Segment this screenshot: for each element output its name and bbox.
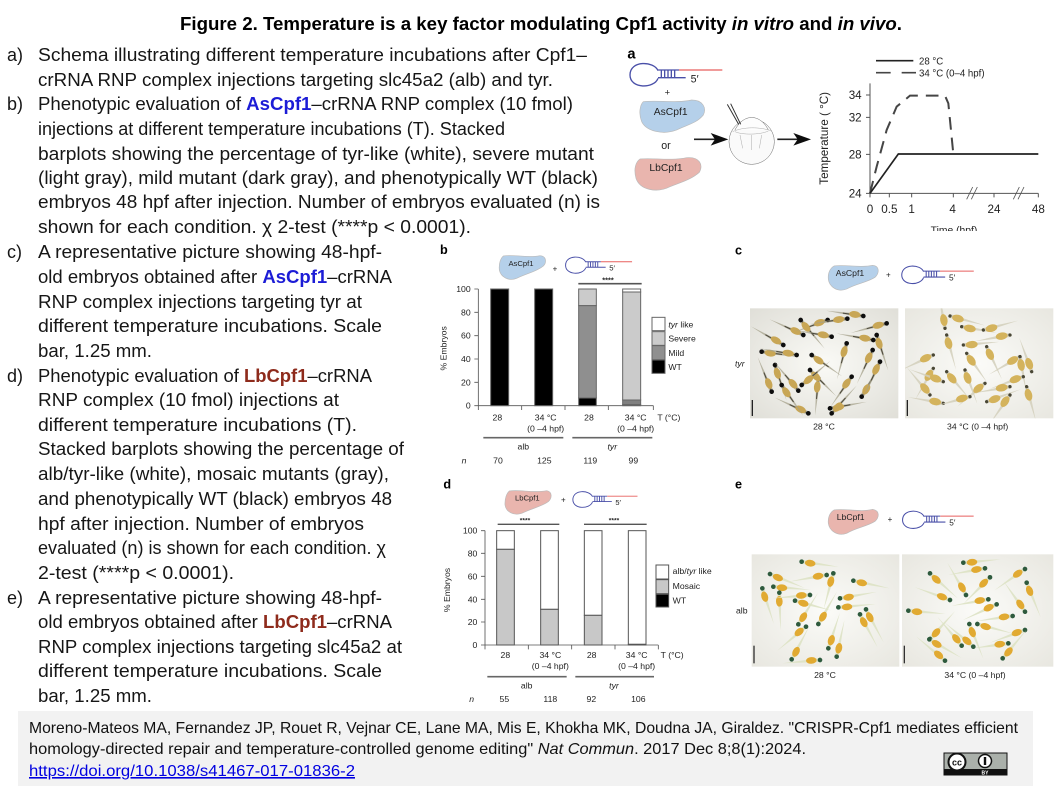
crRNA hairpin: 5′ — [615, 498, 621, 507]
x labels: alb — [518, 441, 529, 451]
temperature line chart — [818, 57, 1045, 237]
x labels: 28 — [584, 412, 594, 422]
temperature line chart: 4 — [949, 203, 956, 216]
axes — [442, 526, 658, 650]
x labels: 70 — [493, 455, 503, 465]
axes: 100 — [463, 526, 478, 536]
x labels: n — [462, 455, 467, 465]
arrow — [777, 133, 811, 146]
x labels — [462, 412, 680, 465]
caption b: shown for each condition. χ 2-test (****p < 0.0001). — [38, 217, 471, 237]
axes: 100 — [456, 284, 471, 294]
citation box: https://doi.org/10.1038/s41467-017-01836-2 — [29, 763, 355, 780]
citation box: Moreno-Mateos MA, Fernandez JP, Rouet R, Vejnar CE, Lane MA, Mis E, Khokha MK, Doudna JA, Giraldez. "CRISPR-Cpf1 mediates efficient — [29, 720, 1019, 737]
photo: tyr 28 °C — [750, 307, 898, 418]
AsCpf1 blob — [828, 265, 878, 290]
x labels: 99 — [629, 455, 638, 465]
photo: tyr 34 °C — [899, 292, 1053, 426]
axes: 40 — [461, 354, 471, 364]
x labels: 28 — [493, 412, 502, 422]
photo: alb 34 °C — [902, 554, 1053, 667]
x labels: 92 — [587, 694, 596, 704]
title: Figure 2. Temperature is a key factor modulating Cpf1 activity in vitro and in vivo. — [180, 14, 902, 34]
LbCpf1 blob: LbCpf1 — [837, 512, 865, 522]
temperature line chart: 34 — [849, 89, 862, 102]
temperature line chart: Temperature ( °C) — [818, 92, 831, 185]
x labels: 119 — [583, 455, 597, 465]
CC BY badge: BY — [982, 770, 989, 776]
caption c: RNP complex injections targeting tyr at — [38, 292, 362, 312]
axes: 20 — [461, 377, 471, 387]
caption c: bar, 1.25 mm. — [38, 341, 152, 361]
crRNA hairpin — [630, 64, 722, 86]
x labels: 34 °C — [625, 412, 647, 422]
crRNA hairpin: 5′ — [949, 273, 956, 283]
legend: Mosaic — [673, 581, 701, 591]
caption b: b) — [7, 94, 23, 114]
significance bar: **** — [602, 276, 614, 285]
caption e: different temperature incubations. Scale — [38, 661, 382, 681]
significance bars: **** — [609, 518, 620, 525]
panel c: AsCpf1 embryo photos: tyr — [735, 359, 746, 369]
x labels: 34 °C — [626, 650, 648, 660]
axes: % Embryos — [439, 326, 449, 370]
clip of axis title — [880, 231, 1050, 239]
bars — [491, 289, 641, 406]
x labels: (0 –4 hpf) — [527, 423, 564, 433]
panel a: schema and temperature chart — [627, 46, 1045, 237]
AsCpf1 blob: AsCpf1 — [836, 268, 864, 278]
caption d: alb/tyr-like (white), mosaic mutants (gray), — [38, 464, 389, 484]
caption d: hpf after injection. Number of embryos — [38, 514, 364, 534]
caption e: A representative picture showing 48-hpf- — [38, 588, 382, 608]
caption b: Phenotypic evaluation of AsCpf1–crRNA RNP complex (10 fmol) — [38, 94, 573, 114]
AsCpf1 blob: AsCpf1 — [508, 259, 534, 268]
caption c: A representative picture showing 48-hpf- — [38, 242, 382, 262]
significance bars: **** — [520, 518, 531, 525]
arrow — [694, 133, 728, 146]
caption b: embryos 48 hpf after injection. Number of embryos evaluated (n) is — [38, 192, 600, 212]
caption c: different temperature incubations. Scale — [38, 316, 382, 336]
x labels: tyr — [608, 441, 618, 451]
caption list — [7, 45, 600, 706]
photo: alb 28 °C — [752, 554, 899, 667]
legend: WT — [668, 362, 683, 372]
LbCpf1 blob: LbCpf1 — [649, 163, 683, 174]
x labels: 34 °C — [535, 412, 557, 422]
caption b: injections at different temperature incubations (T). Stacked — [38, 119, 505, 139]
caption d: Stacked barplots showing the percentage of — [38, 439, 405, 459]
LbCpf1 blob: LbCpf1 — [515, 494, 540, 503]
panel a: schema and temperature chart: or — [661, 140, 671, 152]
LbCpf1 blob — [505, 491, 551, 514]
caption d: Phenotypic evaluation of LbCpf1–crRNA — [38, 366, 372, 386]
temperature line chart: Time (hpf) — [931, 226, 977, 237]
x labels: T (°C) — [661, 650, 684, 660]
caption e: bar, 1.25 mm. — [38, 686, 152, 706]
temperature line chart: 0 — [867, 203, 874, 216]
temperature line chart: 48 — [1032, 203, 1045, 216]
injected embryo — [727, 104, 774, 164]
caption e: RNP complex injections targeting slc45a2 at — [38, 637, 402, 657]
caption d: 2-test (****p < 0.0001). — [38, 563, 234, 583]
crRNA hairpin — [902, 266, 974, 284]
significance bar — [578, 276, 642, 285]
caption a: a) — [7, 45, 23, 65]
LbCpf1 blob — [828, 509, 878, 534]
significance bars — [498, 518, 647, 525]
caption a: Schema illustrating different temperature incubations after Cpf1– — [38, 45, 587, 65]
axes: 80 — [468, 548, 478, 558]
panel c: AsCpf1 embryo photos: + — [886, 271, 891, 280]
x labels: 28 — [501, 650, 510, 660]
axes: 40 — [468, 594, 478, 604]
temperature line chart: 28 — [849, 148, 862, 161]
temperature line chart: 0.5 — [881, 203, 897, 216]
caption d: evaluated (n) is shown for each condition. χ — [38, 538, 387, 558]
x labels: 28 — [587, 650, 597, 660]
axes: 0 — [466, 401, 471, 411]
caption e: e) — [7, 588, 23, 608]
legend: WT — [673, 596, 687, 606]
panel b: AsCpf1 stacked bars: + — [553, 264, 558, 273]
panel e: LbCpf1 embryo photos: e — [735, 477, 742, 491]
legend — [656, 565, 712, 607]
x labels: T (°C) — [657, 412, 680, 422]
caption b: (light gray), mild mutant (dark gray), and phenotypically WT (black) — [38, 168, 598, 188]
legend: Severe — [668, 334, 696, 344]
crRNA hairpin: 5′ — [691, 73, 699, 85]
crRNA hairpin: 5′ — [609, 264, 616, 273]
panel e: LbCpf1 embryo photos: 28 °C — [814, 670, 836, 680]
x labels: 125 — [537, 455, 552, 465]
x labels: 106 — [631, 694, 646, 704]
citation box — [18, 711, 1033, 786]
x labels: 118 — [543, 694, 557, 704]
caption c: old embryos obtained after AsCpf1–crRNA — [38, 267, 392, 287]
x labels: (0 –4 hpf) — [618, 661, 655, 671]
caption a: crRNA RNP complex injections targeting slc45a2 (alb) and tyr. — [38, 70, 553, 90]
x labels: n — [469, 694, 474, 704]
crRNA hairpin — [903, 511, 974, 528]
panel a: schema and temperature chart: + — [665, 88, 670, 98]
caption a — [7, 45, 587, 90]
AsCpf1 blob — [499, 255, 546, 279]
x labels: tyr — [609, 680, 620, 690]
panel c: AsCpf1 embryo photos: 28 °C — [813, 421, 835, 431]
x labels: (0 –4 hpf) — [532, 661, 569, 671]
panel d: LbCpf1 stacked bars: d — [443, 478, 451, 492]
caption e: old embryos obtained after LbCpf1–crRNA — [38, 612, 392, 632]
axes: % Embryos — [442, 567, 452, 612]
panel c: AsCpf1 embryo photos: c — [735, 244, 742, 258]
crRNA hairpin — [566, 257, 632, 273]
caption d: RNP complex (10 fmol) injections at — [38, 390, 339, 410]
caption d: d) — [7, 366, 23, 386]
x labels: alb — [521, 680, 533, 690]
AsCpf1 blob — [640, 100, 705, 132]
caption d: different temperature incubations (T). — [38, 415, 357, 435]
citation box: homology-directed repair and temperature-controlled genome editing" Nat Commun. 2017 Dec 8;8(1):2024. — [29, 741, 806, 758]
axes: 0 — [473, 640, 478, 650]
panel b: AsCpf1 stacked bars: b — [440, 243, 448, 257]
crRNA hairpin — [573, 492, 637, 507]
caption d: and phenotypically WT (black) embryos 48 — [38, 489, 392, 509]
legend — [652, 317, 696, 373]
temperature line chart: 28 °C — [919, 57, 943, 68]
CC BY badge: cc — [952, 758, 962, 768]
CC BY badge — [944, 753, 1007, 776]
x labels: 55 — [500, 694, 509, 704]
axes: 20 — [468, 617, 478, 627]
axes — [439, 284, 653, 411]
panel a: schema and temperature chart: a — [627, 46, 636, 62]
legend: tyr like — [668, 319, 694, 329]
bars — [497, 531, 646, 645]
temperature line chart: 1 — [908, 203, 915, 216]
caption d — [7, 366, 405, 583]
panel d: LbCpf1 stacked bars: + — [561, 495, 566, 504]
legend: Mild — [668, 348, 684, 358]
caption e — [7, 588, 402, 706]
caption b: barplots showing the percentage of tyr-like (white), severe mutant — [38, 144, 594, 164]
axes: 60 — [461, 331, 471, 341]
AsCpf1 blob: AsCpf1 — [654, 107, 688, 118]
x labels: 34 °C — [539, 650, 561, 660]
caption b — [7, 94, 600, 237]
axes: 80 — [461, 307, 471, 317]
panel e: LbCpf1 embryo photos: + — [888, 515, 893, 524]
temperature line chart: 34 °C (0–4 hpf) — [919, 69, 985, 80]
temperature line chart: 24 — [849, 188, 862, 201]
axes: 60 — [468, 571, 478, 581]
temperature line chart: 32 — [849, 111, 862, 124]
panel b: AsCpf1 stacked bars — [439, 243, 696, 465]
panel e: LbCpf1 embryo photos: alb — [736, 605, 748, 615]
legend: alb/tyr like — [673, 566, 712, 576]
caption c: c) — [7, 242, 22, 262]
caption c — [7, 242, 392, 361]
crRNA hairpin: 5′ — [949, 519, 956, 528]
panel e: LbCpf1 embryo photos — [735, 477, 1053, 680]
panel c: AsCpf1 embryo photos — [735, 244, 1053, 431]
panel e: LbCpf1 embryo photos: 34 °C (0 –4 hpf) — [944, 670, 1006, 680]
LbCpf1 blob — [635, 158, 701, 190]
panel d: LbCpf1 stacked bars — [442, 478, 712, 704]
x labels: (0 –4 hpf) — [617, 423, 654, 433]
temperature line chart: 24 — [988, 203, 1001, 216]
panel c: AsCpf1 embryo photos: 34 °C (0 –4 hpf) — [947, 421, 1008, 431]
x labels — [469, 650, 684, 704]
